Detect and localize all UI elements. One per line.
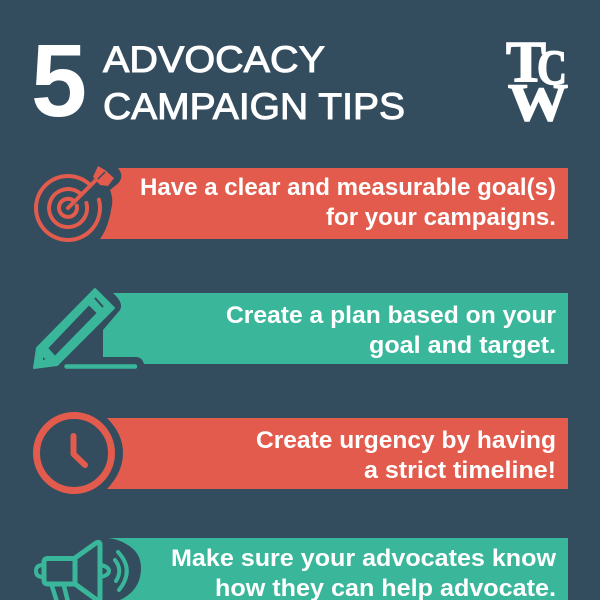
icon: pencil: [34, 289, 135, 368]
banner: tip 4: [108, 538, 568, 600]
icon: megaphone: [36, 542, 127, 600]
banner: tip 1: [100, 168, 568, 239]
tip 2 text: Create a plan based on your: [226, 302, 556, 329]
panel: tip 3: [36, 416, 568, 490]
tip 1 text: for your campaigns.: [326, 204, 556, 231]
tip 3 text: [256, 427, 556, 484]
tip 2 text: goal and target.: [369, 332, 556, 359]
tip 2 text: [226, 302, 556, 359]
logo: TCW: T: [506, 29, 546, 94]
panel: tip 4: [36, 538, 568, 600]
icon: clock: [36, 416, 112, 490]
tip 1 text: [140, 174, 556, 231]
title: CAMPAIGN TIPS: [103, 86, 405, 127]
numeral: 5: 5: [31, 23, 87, 138]
tip 4 text: [171, 545, 556, 600]
banner: tip 3: [107, 418, 568, 489]
icon: target with arrow: [36, 166, 114, 240]
logo: TCW: W: [508, 74, 568, 132]
banner: tip 2: [103, 293, 568, 364]
logo: TCW: [506, 29, 568, 132]
tip 3 text: a strict timeline!: [364, 457, 556, 484]
title: ADVOCACY: [103, 39, 325, 80]
panel: tip 2: [34, 289, 568, 368]
logo: TCW: C: [537, 39, 567, 95]
tip 4 text: Make sure your advocates know: [171, 545, 556, 572]
panel: tip 1: [36, 166, 568, 240]
tip 3 text: Create urgency by having: [256, 427, 556, 454]
tip 1 text: Have a clear and measurable goal(s): [140, 174, 556, 201]
title: [103, 39, 405, 127]
